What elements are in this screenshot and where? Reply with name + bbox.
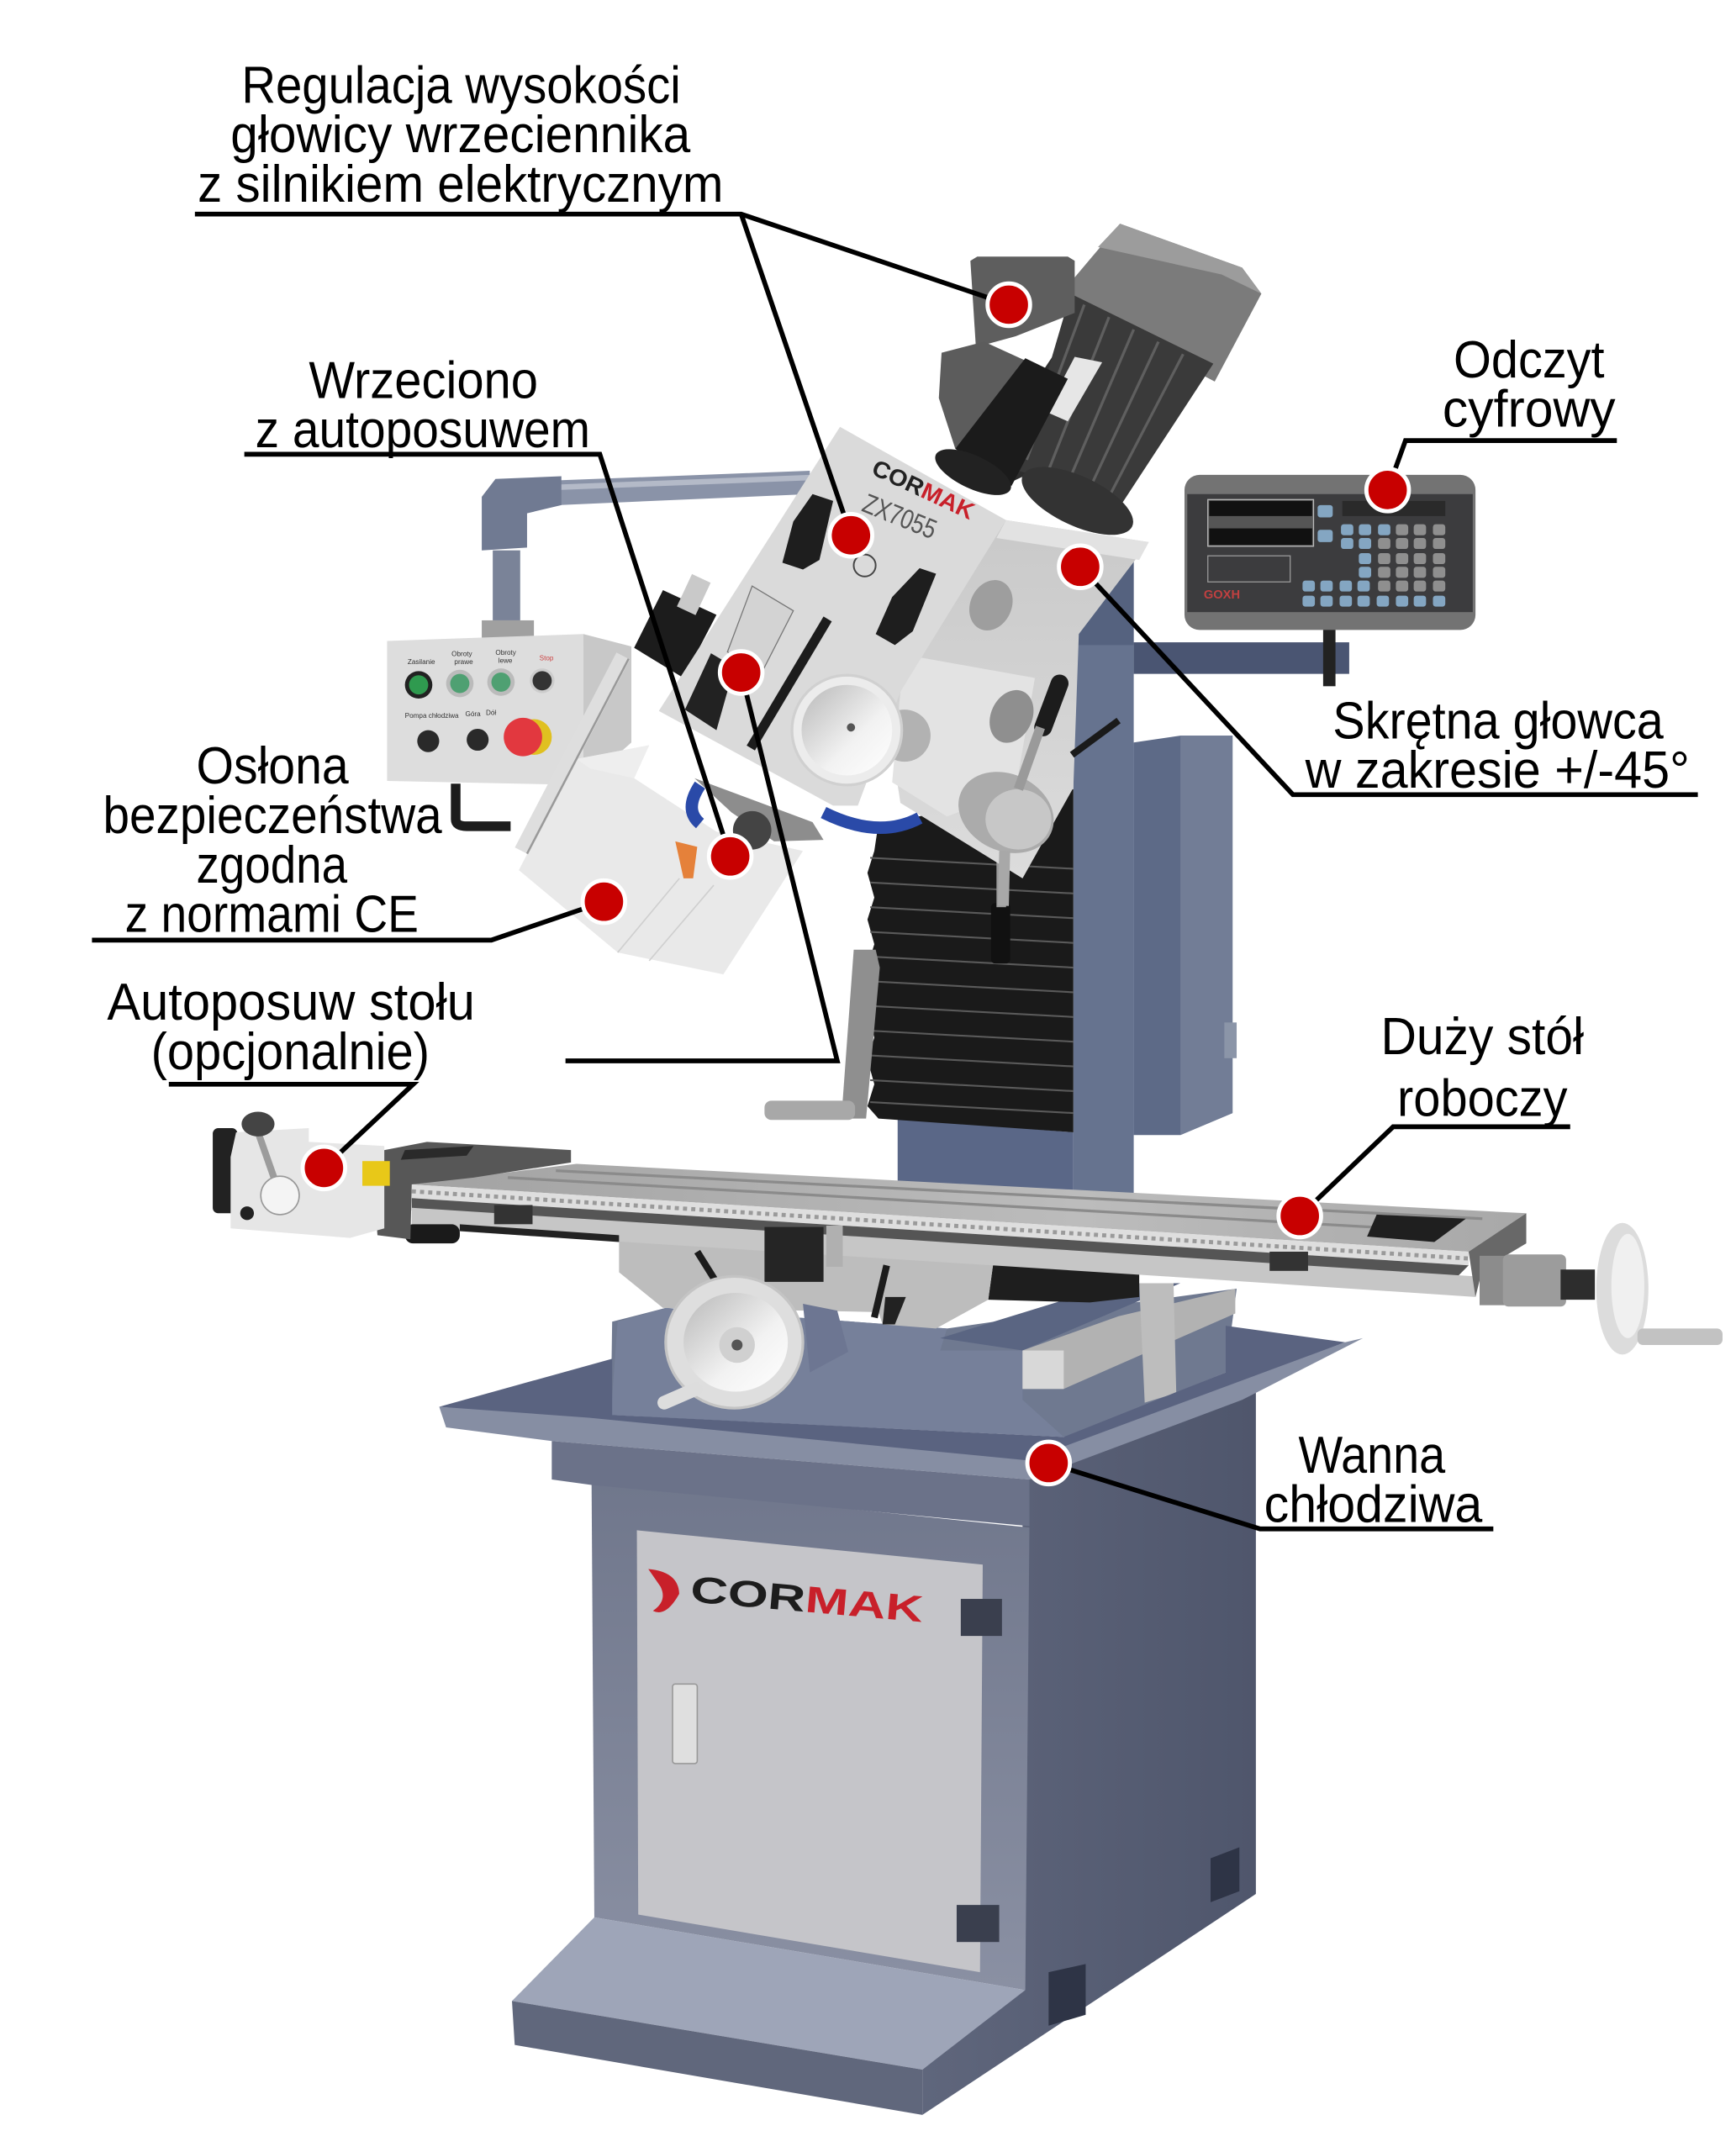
work table [349, 1142, 1527, 1297]
callout: Regulacja wysokości głowicy wrzeciennika [195, 56, 1009, 535]
heading text [107, 973, 475, 1081]
heading text: chłodziwa [1264, 1476, 1483, 1534]
leader line [1080, 567, 1698, 794]
control box: Pompa chłodziwa [405, 712, 459, 720]
knee block [611, 1284, 1237, 1437]
control box: Stop [540, 654, 554, 662]
coolant pipe and elbow [482, 471, 810, 638]
heading text: głowicy wrzeciennika [230, 106, 691, 164]
power feed unit [213, 1111, 390, 1238]
saddle handwheel [664, 1276, 848, 1408]
heading text: z normami CE [125, 886, 419, 944]
heading text: Autoposuw stołu [107, 973, 475, 1031]
control box: Dół [486, 709, 496, 717]
digital readout unit [1185, 475, 1475, 630]
heading text: z silnikiem elektrycznym [198, 156, 723, 214]
column [898, 549, 1134, 1194]
heading text [256, 351, 590, 459]
heading text: z autoposuwem [256, 401, 590, 459]
crank handle [764, 950, 880, 1120]
milling head front panel: ZX7055 [858, 488, 942, 545]
heading text: cyfrowy [1443, 381, 1616, 439]
coolant tray [439, 1326, 1363, 1480]
leader line to head panel [566, 672, 837, 1061]
callout: Wanna chłodziwa [1048, 1427, 1493, 1534]
leader line [92, 902, 604, 940]
heading text [1380, 1008, 1584, 1127]
heading text: Skrętna głowca [1332, 692, 1664, 750]
heading text: Duży stół [1380, 1008, 1584, 1066]
heading text: Regulacja wysokości [241, 56, 681, 114]
machine illustration [213, 224, 1723, 2115]
digital readout unit: GOXH [1204, 588, 1240, 602]
callout: Wrzeciono z autoposuwem [245, 351, 731, 857]
stand side wall [922, 1389, 1256, 2115]
heading text [198, 56, 723, 214]
control box: Obroty [451, 650, 473, 657]
heading text: (opcjonalnie) [151, 1023, 430, 1081]
table feed stop block [764, 1226, 842, 1282]
heading text: roboczy [1397, 1069, 1567, 1127]
table end handwheel [1480, 1223, 1723, 1354]
safety guard [519, 656, 803, 974]
readout support arm [1134, 625, 1349, 686]
heading text: w zakresie +/-45° [1305, 741, 1690, 799]
electric motor body [1012, 293, 1213, 549]
side storage cabinet on column [1134, 736, 1237, 1135]
heading text [1264, 1427, 1483, 1534]
spindle, feed lever and coolant hose [634, 574, 920, 878]
leader line [1388, 440, 1617, 490]
heading text [1305, 692, 1690, 799]
callout: Duży stół roboczy [1300, 1008, 1584, 1216]
stand front frame [592, 1482, 1029, 1990]
heading text [103, 737, 442, 944]
callout: Odczyt cyfrowy [1388, 331, 1617, 490]
heading text: Wrzeciono [309, 351, 538, 409]
heading text [1443, 331, 1616, 439]
heading text: Odczyt [1454, 331, 1605, 389]
heading text: zgodna [196, 836, 348, 894]
CORMAK logo [645, 1565, 925, 1635]
milling head front panel [659, 427, 1006, 805]
heading text: Wanna [1298, 1427, 1446, 1485]
callout: Osłona bezpieczeństwa [92, 737, 604, 944]
leader line [245, 454, 731, 857]
leader line [169, 1084, 413, 1168]
leader lines [195, 214, 1009, 535]
leader line [1300, 1126, 1570, 1216]
red marker dots [303, 283, 1409, 1485]
plinth [512, 1917, 1026, 2115]
under-tray collar [551, 1441, 1029, 1527]
milling head front panel: CORMAK [868, 455, 979, 525]
height adjustment gearbox and housing [929, 256, 1074, 504]
heading text: bezpieczeństwa [103, 787, 442, 845]
motor fan cover [1068, 224, 1261, 382]
callout: Skrętna głowca [1080, 567, 1698, 799]
control box: Góra [465, 710, 481, 718]
control box [387, 634, 631, 826]
cabinet door [637, 1530, 1002, 1972]
CORMAK logo: COR MAK [689, 1569, 925, 1630]
tool-table saddle and cross slide [619, 1235, 1139, 1328]
control box: prawe [454, 658, 473, 666]
heading text: Osłona [196, 737, 349, 795]
leader line [1048, 1463, 1493, 1529]
motor backing between cylinder and motor [1009, 309, 1084, 483]
callout: Autoposuw stołu [107, 973, 475, 1168]
milling head side block [879, 520, 1149, 906]
control box: Obroty [495, 649, 517, 657]
control box: lewe [499, 657, 513, 665]
control box: Zasilanie [408, 658, 435, 666]
bellows cover [868, 789, 1074, 1132]
